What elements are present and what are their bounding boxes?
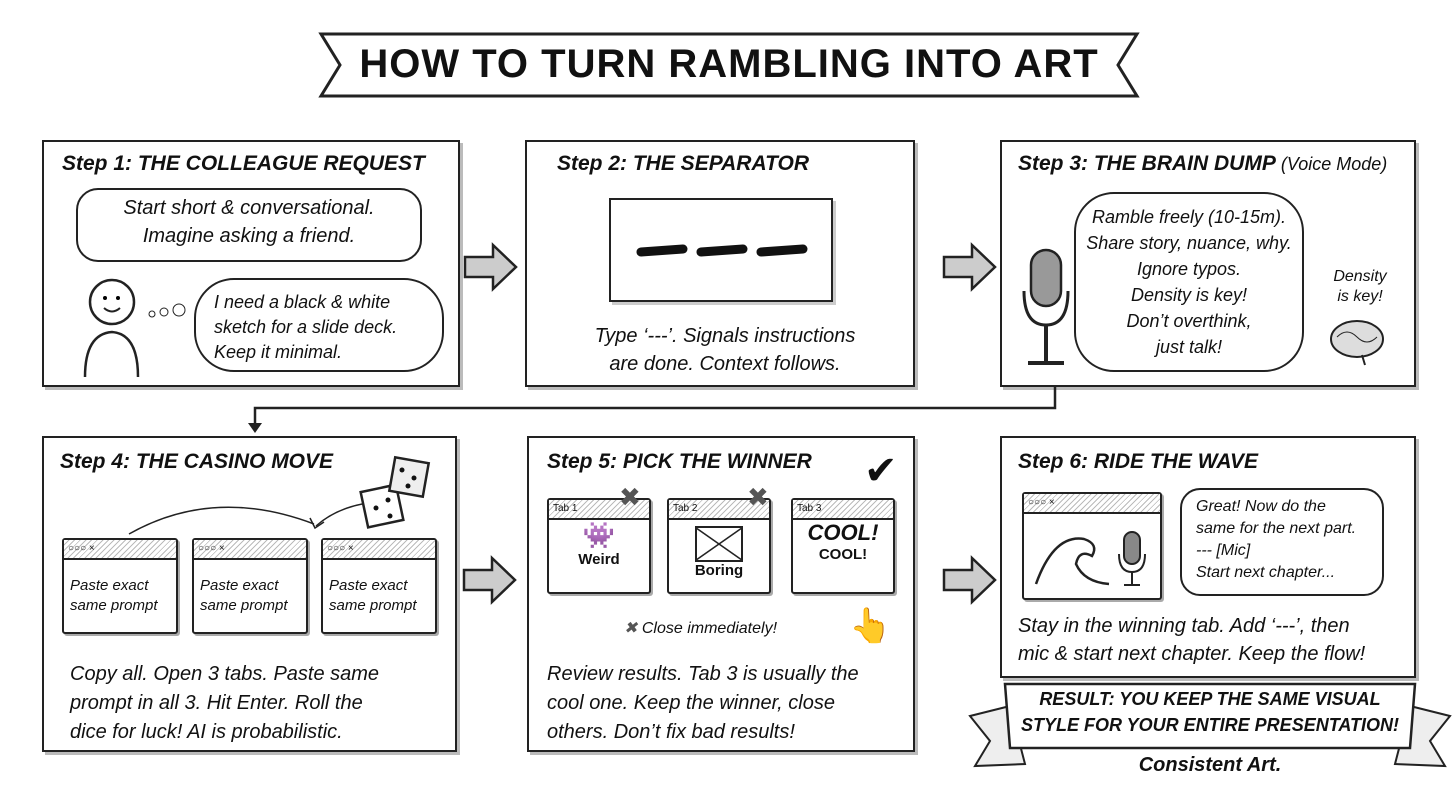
- panel: step 2: [525, 140, 915, 387]
- icon: brain: Density: [1333, 268, 1387, 285]
- panel: step 6: [1000, 436, 1416, 678]
- speech bubble step 6: same for the next part.: [1196, 520, 1356, 537]
- icon: hand: 👆: [849, 607, 891, 645]
- result banner: RESULT: YOU KEEP THE SAME VISUAL: [1039, 689, 1381, 709]
- separator box: [609, 198, 833, 302]
- panel: step 5: ✔: [864, 449, 898, 493]
- title banner: [318, 32, 1140, 98]
- heading step 4: Step 4: THE CASINO MOVE: [60, 450, 333, 473]
- browser windows: same prompt: [200, 597, 288, 614]
- speech bubble step 3: Ramble freely (10-15m).: [1092, 207, 1286, 227]
- result banner: Consistent Art.: [1139, 754, 1281, 776]
- speech bubble step 3: Density is key!: [1131, 285, 1247, 305]
- tabs: COOL!: [819, 546, 867, 563]
- icon: person: [84, 278, 186, 377]
- thought cloud: I need a black & white: [214, 292, 390, 312]
- browser windows: Paste exact: [200, 577, 278, 594]
- text step 4: dice for luck! AI is probabilistic.: [70, 721, 343, 743]
- callout close: ✖ Close immediately!: [624, 620, 777, 637]
- arrow 1: [464, 242, 518, 292]
- text step 6: Stay in the winning tab. Add ‘---’, then: [1018, 615, 1350, 637]
- heading step 6: Step 6: RIDE THE WAVE: [1018, 450, 1258, 473]
- heading step 1: Step 1: THE COLLEAGUE REQUEST: [62, 152, 425, 175]
- text step 6: mic & start next chapter. Keep the flow!: [1018, 643, 1365, 665]
- speech bubble step 3: Share story, nuance, why.: [1086, 233, 1292, 253]
- text step 2: are done. Context follows.: [609, 353, 841, 375]
- thought cloud: [194, 278, 444, 372]
- browser windows: ○○○ ×: [198, 543, 225, 554]
- panel: step 5: ✖: [747, 482, 769, 512]
- heading step 5: Step 5: PICK THE WINNER: [547, 450, 812, 473]
- text step 4: prompt in all 3. Hit Enter. Roll the: [70, 692, 363, 714]
- panel: step 4: [42, 436, 457, 752]
- browser: wave and mic: [1022, 492, 1162, 600]
- icon: microphone: [1022, 248, 1070, 365]
- arrow 4: [462, 555, 517, 605]
- tabs: Tab 2: [673, 503, 697, 514]
- thought cloud: Keep it minimal.: [214, 342, 342, 362]
- tabs: Boring: [695, 562, 743, 579]
- speech bubble step 3: Don’t overthink,: [1126, 311, 1252, 331]
- result banner: STYLE FOR YOUR ENTIRE PRESENTATION!: [1021, 715, 1399, 735]
- text step 4: [70, 663, 379, 743]
- browser windows: Paste exact: [329, 577, 407, 594]
- tabs: Tab 3: [797, 503, 821, 514]
- icon: dice: [128, 456, 430, 535]
- heading step 2: Step 2: THE SEPARATOR: [557, 152, 809, 175]
- speech bubble step 3: [1074, 192, 1304, 372]
- text step 5: [547, 663, 859, 743]
- text step 2: Type ‘---’. Signals instructions: [595, 325, 855, 347]
- icon: brain: [1333, 268, 1388, 305]
- panel: step 3: [1000, 140, 1416, 387]
- icon: marks: ✖: [619, 482, 641, 512]
- browser windows: same prompt: [70, 597, 158, 614]
- speech bubble: [76, 188, 422, 262]
- speech bubble step 6: Start next chapter...: [1196, 564, 1335, 581]
- text step 4: Copy all. Open 3 tabs. Paste same: [70, 663, 379, 685]
- text step 5: others. Don’t fix bad results!: [547, 721, 795, 743]
- speech bubble step 6: --- [Mic]: [1196, 542, 1250, 559]
- panel: step 5: [527, 436, 915, 752]
- text step 6: [1018, 615, 1365, 665]
- tabs: Weird: [578, 551, 620, 568]
- icon: brain: is key!: [1337, 288, 1383, 305]
- heading step 3: Step 3: THE BRAIN DUMP (Voice Mode): [1018, 152, 1387, 175]
- result banner: [968, 682, 1452, 776]
- browser windows: ○○○ ×: [68, 543, 95, 554]
- speech bubble step 3: Ignore typos.: [1137, 259, 1241, 279]
- browser windows: [62, 538, 439, 636]
- arrow 5: [942, 555, 997, 605]
- tabs: Tab 1: [553, 503, 577, 514]
- title banner: HOW TO TURN RAMBLING INTO ART: [359, 42, 1099, 86]
- browser windows: same prompt: [329, 597, 417, 614]
- text step 2: [595, 325, 855, 375]
- thought cloud: sketch for a slide deck.: [214, 317, 397, 337]
- speech bubble: Imagine asking a friend.: [143, 225, 355, 247]
- arrow 2: [942, 242, 997, 292]
- panel: step 1: [42, 140, 460, 387]
- speech bubble: Start short & conversational.: [123, 197, 375, 219]
- text step 5: cool one. Keep the winner, close: [547, 692, 835, 714]
- browser windows: ○○○ ×: [327, 543, 354, 554]
- speech bubble step 6: Great! Now do the: [1196, 498, 1326, 515]
- speech bubble step 3: just talk!: [1156, 337, 1222, 357]
- text step 5: Review results. Tab 3 is usually the: [547, 663, 859, 685]
- browser windows: Paste exact: [70, 577, 148, 594]
- connector arrow: [248, 387, 1056, 433]
- browser: wave and mic: ○○○ ×: [1028, 497, 1055, 508]
- tabs: [547, 498, 897, 596]
- speech bubble step 6: [1180, 488, 1384, 596]
- tabs: 👾: [583, 520, 615, 550]
- tabs: COOL!: [808, 520, 878, 545]
